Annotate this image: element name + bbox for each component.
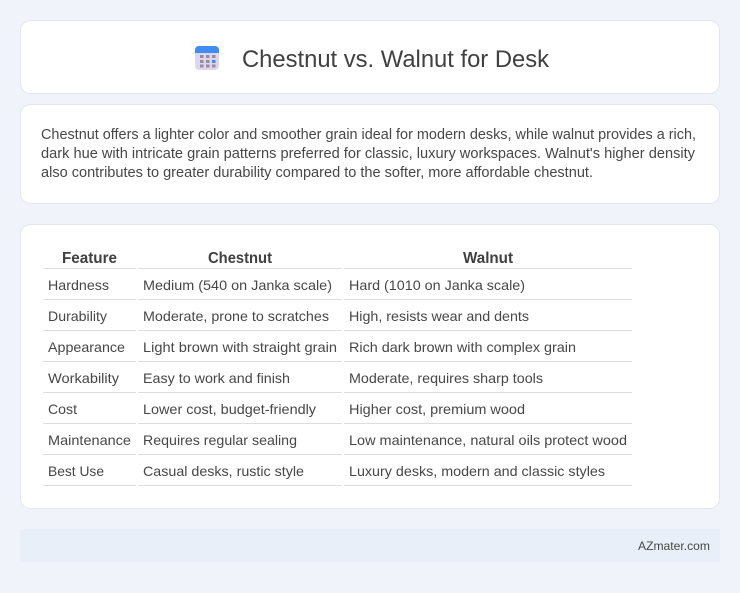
table row: Cost bbox=[43, 401, 632, 424]
text block: description: also contributes to greater durability compared to the softer, more affordable chestnut. bbox=[41, 165, 593, 181]
table row: Maintenance bbox=[43, 432, 632, 454]
table header row bbox=[43, 250, 632, 268]
table row: Cost: Lower cost, budget-friendly bbox=[143, 401, 316, 417]
table row: Workability bbox=[43, 370, 632, 392]
table row: Best Use: Best Use bbox=[48, 463, 104, 479]
table row: Durability: High, resists wear and dents bbox=[349, 308, 529, 324]
table row: Workability: Workability bbox=[48, 370, 119, 386]
text block: description: dark hue with intricate grain patterns preferred for classic, luxury workspaces. Walnut's higher density bbox=[41, 146, 696, 162]
table row: Hardness: Medium (540 on Janka scale) bbox=[143, 277, 332, 293]
table header row: Feature bbox=[62, 250, 117, 267]
table row: Appearance: Light brown with straight grain bbox=[143, 339, 337, 355]
text block: description: Chestnut offers a lighter color and smoother grain ideal for modern desks, while walnut provides a rich, bbox=[41, 127, 696, 143]
table row: Maintenance: Requires regular sealing bbox=[143, 432, 297, 448]
table row: Hardness bbox=[43, 277, 632, 300]
table row: Durability: Moderate, prone to scratches bbox=[143, 308, 329, 324]
panel: description bbox=[20, 104, 720, 204]
table header row: Walnut bbox=[463, 250, 514, 267]
table row: Maintenance: Maintenance bbox=[48, 432, 131, 448]
table row: Workability: Moderate, requires sharp tools bbox=[349, 370, 543, 386]
table row: Durability bbox=[43, 308, 632, 330]
table row: Appearance bbox=[43, 339, 632, 362]
table row: Best Use: Casual desks, rustic style bbox=[143, 463, 304, 479]
footer bar bbox=[20, 529, 720, 562]
table header row: Chestnut bbox=[208, 250, 273, 267]
table row: Appearance: Rich dark brown with complex grain bbox=[349, 339, 576, 355]
icon: calendar bbox=[195, 46, 219, 70]
table row: Cost: Higher cost, premium wood bbox=[349, 401, 525, 417]
text block: description bbox=[41, 127, 696, 181]
panel: comparison table bbox=[20, 224, 720, 508]
table row: Best Use: Luxury desks, modern and classic styles bbox=[349, 463, 605, 479]
panel: title header bbox=[20, 20, 720, 94]
table row: Workability: Easy to work and finish bbox=[143, 370, 290, 386]
table row: Cost: Cost bbox=[48, 401, 77, 417]
table row: Durability: Durability bbox=[48, 308, 107, 324]
table row: Maintenance: Low maintenance, natural oils protect wood bbox=[349, 432, 627, 448]
title: Chestnut vs. Walnut for Desk bbox=[242, 46, 550, 73]
table row: Appearance: Appearance bbox=[48, 339, 125, 355]
table row: Best Use bbox=[43, 463, 632, 486]
table row: Hardness: Hard (1010 on Janka scale) bbox=[349, 277, 525, 293]
footer credit: AZmater.com bbox=[638, 539, 710, 553]
table row: Hardness: Hardness bbox=[48, 277, 109, 293]
